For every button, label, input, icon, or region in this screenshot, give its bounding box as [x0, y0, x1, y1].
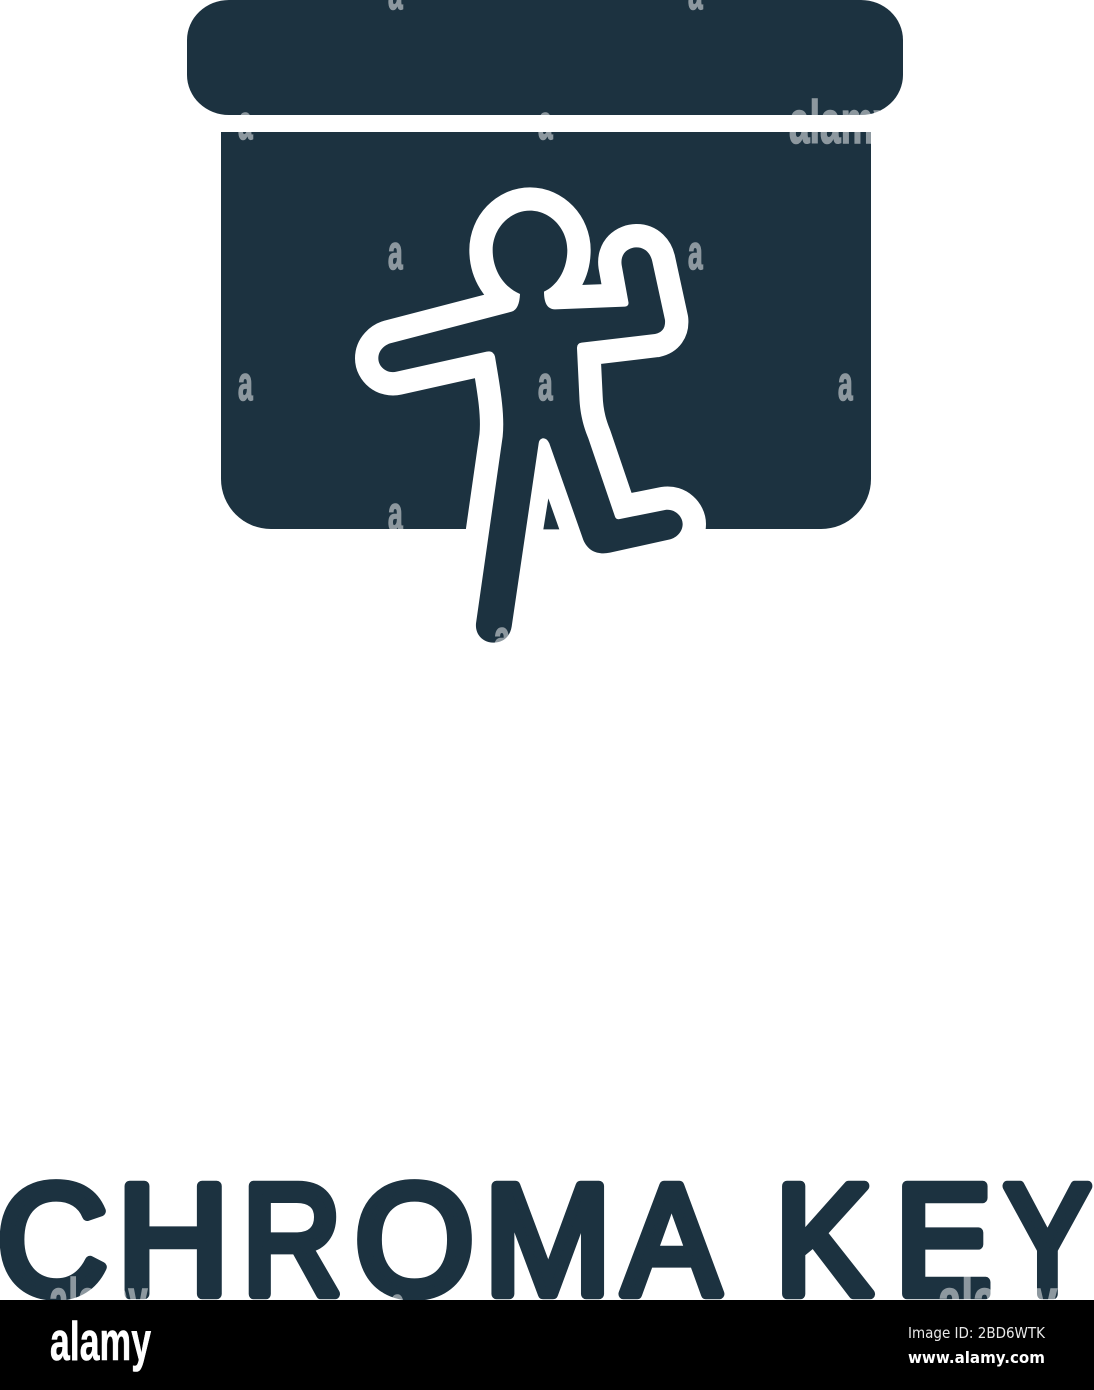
- watermark overlay: alamy: [49, 1268, 148, 1334]
- watermark overlay: a: [388, 227, 403, 280]
- watermark overlay: a: [390, 1279, 405, 1332]
- icon: chroma key screen with figure: [187, 0, 903, 643]
- icon: dancing person: [378, 211, 683, 643]
- footer logo: alamy: [50, 1310, 151, 1372]
- watermark overlay: a: [388, 488, 403, 541]
- watermark overlay: alamy: [789, 89, 895, 156]
- watermark overlay: a: [238, 358, 253, 411]
- title: O: [355, 1152, 474, 1327]
- image id: Image ID: 2BD6WTK: [908, 1324, 1046, 1342]
- footer bar: [0, 1300, 1094, 1390]
- title: E: [895, 1153, 992, 1328]
- icon: backdrop screen: [221, 132, 871, 529]
- title: A: [623, 1153, 720, 1328]
- watermark overlay: a: [494, 612, 511, 665]
- title: Y: [1004, 1151, 1091, 1328]
- icon: top roller bar: [187, 0, 903, 115]
- title: C: [0, 1152, 108, 1327]
- title: R: [242, 1153, 342, 1328]
- watermark overlay: a: [688, 227, 703, 280]
- watermark overlay: a: [538, 97, 553, 150]
- watermark overlay: a: [238, 97, 253, 150]
- title: H: [117, 1153, 229, 1328]
- website url: www.alamy.com: [908, 1348, 1045, 1367]
- watermark overlay: a: [538, 358, 553, 411]
- title: [0, 1151, 1091, 1328]
- title: K: [775, 1153, 872, 1328]
- watermark overlay: alamy: [938, 1267, 1057, 1334]
- watermark overlay: a: [838, 358, 853, 411]
- title: M: [484, 1152, 612, 1327]
